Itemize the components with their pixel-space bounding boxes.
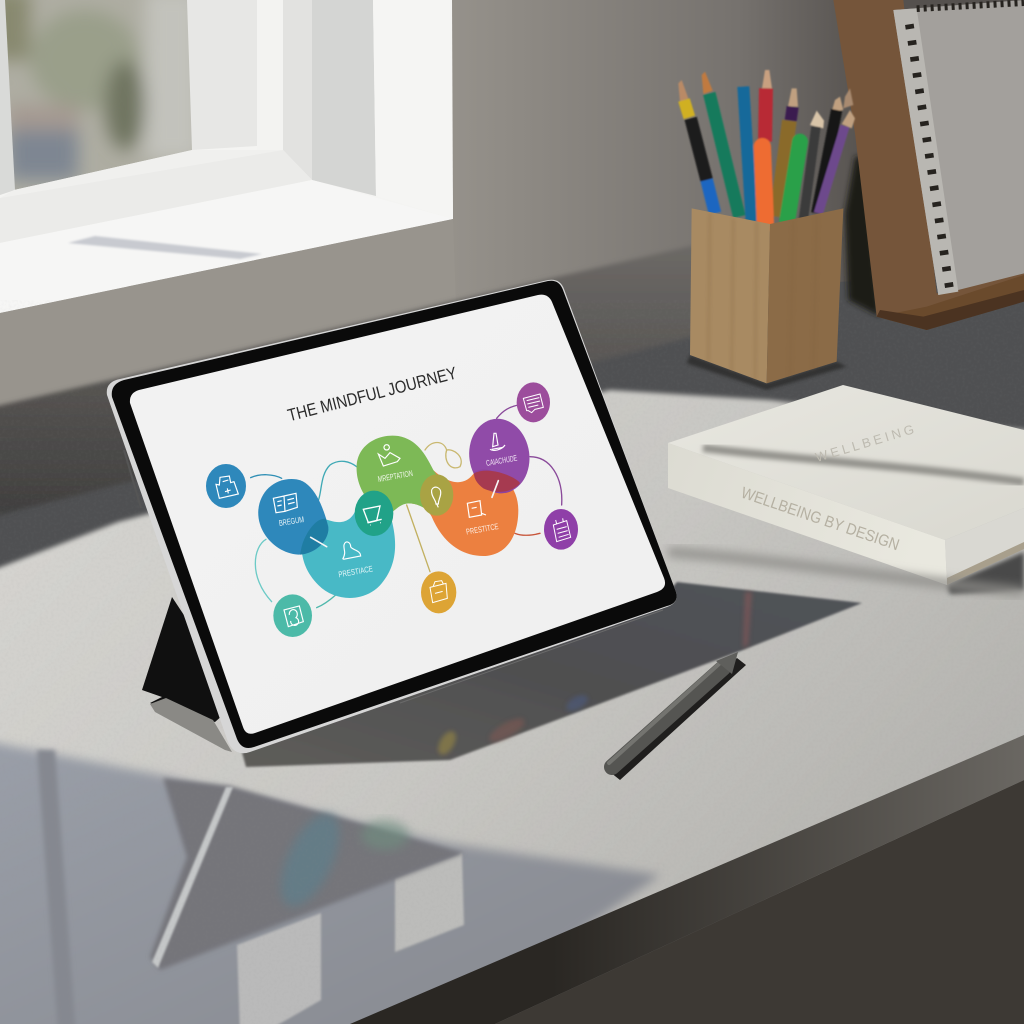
dark gap shadow	[845, 157, 880, 317]
icon: meditating figure	[343, 542, 361, 559]
shaded counter front	[0, 738, 660, 1024]
label: breath stage: BREGUM	[278, 514, 305, 528]
cover shadow streak	[703, 448, 1024, 482]
tablet body	[107, 280, 677, 753]
pen	[609, 652, 746, 780]
blob: blue stage	[258, 479, 328, 555]
window view: blurred garden	[5, 0, 192, 190]
wall	[0, 0, 1024, 420]
blob: teal-green overlap with cart icon	[355, 491, 393, 536]
cup wood stripes	[708, 213, 817, 380]
tablet screen	[130, 295, 665, 734]
book cover	[668, 385, 1024, 540]
cup right face	[767, 208, 843, 383]
tablet reflection	[150, 778, 464, 970]
wooden board	[833, 0, 1024, 330]
node: gold parcel	[421, 571, 456, 613]
board lip	[877, 275, 1024, 330]
icon: open book	[273, 493, 297, 513]
pen tip	[716, 652, 738, 674]
book shadow	[947, 552, 1024, 594]
stage icons	[273, 433, 505, 559]
label: teal stage: PRESTIACE	[338, 563, 374, 579]
connector lines	[251, 405, 562, 608]
infographic on screen	[206, 362, 578, 637]
pencil cup with pencils	[678, 70, 855, 390]
pen lit side	[609, 664, 719, 763]
label: orange stage: PRESTITCE	[465, 521, 499, 537]
node: purple speech note	[517, 382, 550, 422]
spine title: WELLBEING BY DESIGN	[739, 485, 901, 554]
window reveal	[312, 0, 376, 196]
overlap of green and orange with bulb icon	[420, 474, 453, 516]
counter grain	[0, 300, 1024, 1024]
overlap of purple and orange	[474, 471, 520, 492]
blob: orange stage	[408, 470, 518, 556]
countertop	[0, 244, 1024, 1024]
sunlit counter area	[0, 390, 1024, 1024]
label: green stage: MREPTATION	[377, 468, 413, 484]
book spine	[668, 443, 947, 585]
colour reflections in shadow	[434, 592, 752, 758]
pencils	[678, 70, 855, 223]
node: teal knot	[273, 594, 312, 637]
cup left face	[690, 208, 770, 383]
book	[668, 385, 1024, 594]
overlap blue and teal	[300, 519, 328, 555]
title: THE MINDFUL JOURNEY	[285, 362, 459, 425]
window frame: inner faces	[187, 0, 257, 150]
tablet shadow	[240, 582, 862, 767]
pen body	[612, 668, 723, 767]
blob: green stage	[357, 436, 450, 515]
notebook margin	[893, 8, 958, 295]
label: purple stage: CAIACHUDE	[485, 453, 518, 468]
light bars reflected in counter	[237, 913, 321, 1024]
blob: teal stage	[302, 498, 395, 598]
wall ledge below window	[0, 219, 460, 420]
tablet bezel	[112, 281, 677, 748]
blob: purple stage	[464, 415, 534, 497]
tablet	[107, 280, 677, 753]
tablet side buttons	[124, 450, 141, 508]
notebook spiral	[909, 3, 1024, 292]
cover title: WELLBEING	[814, 422, 916, 465]
window sill	[0, 180, 453, 313]
wooden stand and notebook	[833, 0, 1024, 330]
node: blue clipboard	[206, 464, 246, 508]
node: purple checklist	[544, 509, 578, 550]
cabinet	[495, 780, 1024, 1024]
sill shadow streak	[68, 236, 262, 259]
notebook page	[893, 0, 1024, 295]
icon: document chart	[467, 501, 486, 517]
cup shadow	[687, 355, 847, 390]
icon: crown	[378, 445, 400, 466]
window mullion shadow reflection	[37, 750, 76, 1024]
tablet lower edge highlight	[400, 610, 663, 703]
window	[0, 0, 453, 313]
book pages	[945, 508, 1024, 585]
white connector ticks	[311, 481, 498, 547]
icon: candle lotus	[490, 433, 505, 450]
shadow streak on counter	[668, 552, 1024, 592]
backsplash	[0, 244, 700, 520]
folding tablet stand	[142, 597, 240, 752]
counter front edge	[350, 735, 1024, 1024]
pen shadow	[610, 658, 746, 780]
